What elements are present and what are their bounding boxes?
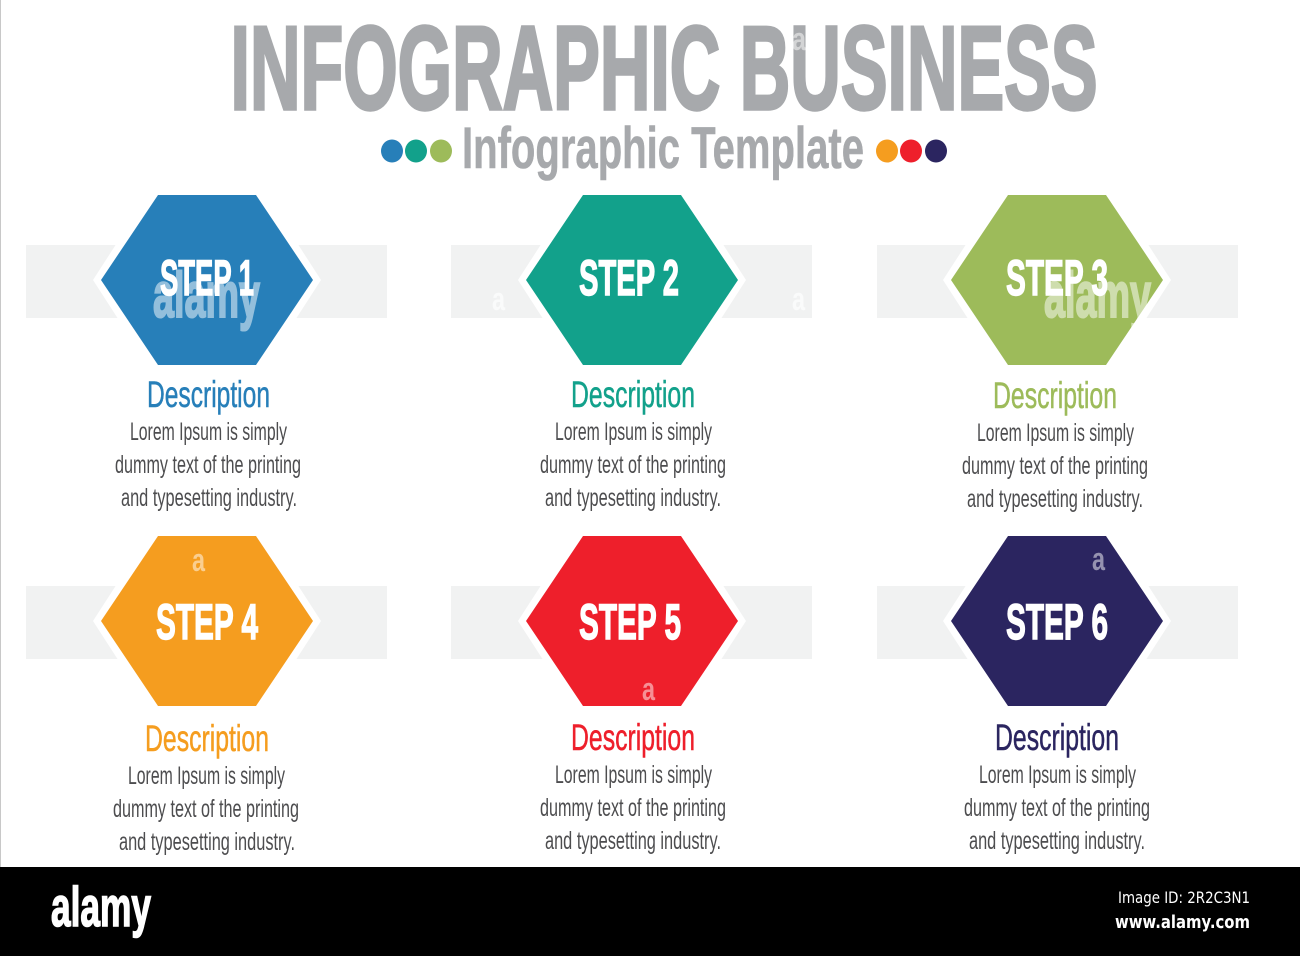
panel: step 1: [26, 187, 387, 512]
subtitle: Infographic Template: [462, 116, 864, 181]
text: body 3: dummy text of the printing: [962, 452, 1148, 480]
hexagon: step 1: [101, 195, 313, 365]
label: step 6: STEP 6: [1006, 594, 1108, 650]
heading: description 3: Description: [993, 375, 1117, 416]
text: body 2: and typesetting industry.: [545, 484, 721, 512]
text: body 4: Lorem Ipsum is simply: [128, 762, 285, 790]
hexagon: step 6: [951, 536, 1163, 706]
text: body 1: and typesetting industry.: [121, 484, 297, 512]
panel: step 2: [451, 187, 812, 512]
icon: right dots: [876, 140, 947, 162]
label: step 4: STEP 4: [156, 594, 258, 650]
text: body 3: Lorem Ipsum is simply: [977, 419, 1134, 447]
heading: description 6: Description: [995, 717, 1119, 758]
panel: step 3: [877, 187, 1238, 513]
panel: step 4: [26, 528, 387, 856]
hexagon: step 5: [526, 536, 738, 706]
label: step 3: STEP 3: [1006, 250, 1108, 306]
hexagon: step 3: [951, 195, 1163, 365]
text: body 2: dummy text of the printing: [540, 451, 726, 479]
label: step 2: STEP 2: [579, 250, 679, 306]
label: step 5: STEP 5: [579, 594, 681, 650]
hexagon: step 4: [101, 536, 313, 706]
text: body 5: [540, 761, 726, 855]
text: body 1: Lorem Ipsum is simply: [130, 418, 287, 446]
icon: left dots: [381, 140, 452, 162]
text: body 6: dummy text of the printing: [964, 794, 1150, 822]
text: body 2: [540, 418, 726, 512]
logo: alamy: alamy: [51, 875, 151, 938]
heading: description 2: Description: [571, 374, 695, 415]
text: website: www.alamy.com: [1115, 912, 1250, 933]
heading: description 1: Description: [147, 374, 270, 415]
panel: step 4: a: [192, 542, 205, 578]
panel: step 5: [451, 528, 812, 855]
panel: step 5: a: [642, 671, 655, 707]
panel: step 6: a: [1092, 541, 1105, 577]
text: body 3: and typesetting industry.: [967, 485, 1143, 513]
text: body 5: and typesetting industry.: [545, 827, 721, 855]
text: body 3: [962, 419, 1148, 513]
footer bar: [0, 867, 1300, 956]
text: body 5: Lorem Ipsum is simply: [555, 761, 712, 789]
text: body 4: dummy text of the printing: [113, 795, 299, 823]
title: a: [792, 21, 806, 57]
heading: description 5: Description: [571, 717, 695, 758]
text: body 6: and typesetting industry.: [969, 827, 1145, 855]
text: body 5: dummy text of the printing: [540, 794, 726, 822]
text: body 6: [964, 761, 1150, 855]
text: body 6: Lorem Ipsum is simply: [979, 761, 1136, 789]
heading: description 4: Description: [145, 718, 269, 759]
text: image id: Image ID: 2R2C3N1: [1118, 888, 1250, 907]
text: body 1: dummy text of the printing: [115, 451, 301, 479]
panel: step 1: alamy: [153, 259, 260, 331]
text: body 2: Lorem Ipsum is simply: [555, 418, 712, 446]
panel: step 2: a: [792, 281, 805, 317]
panel: step 6: [877, 528, 1238, 855]
panel: step 2: a: [492, 281, 505, 317]
label: step 1: STEP 1: [160, 250, 254, 306]
hexagon: step 2: [526, 195, 738, 365]
panel: step 3: alamy: [1044, 259, 1151, 331]
text: body 1: [115, 418, 301, 512]
text: body 4: and typesetting industry.: [119, 828, 295, 856]
text: body 4: [113, 762, 299, 856]
